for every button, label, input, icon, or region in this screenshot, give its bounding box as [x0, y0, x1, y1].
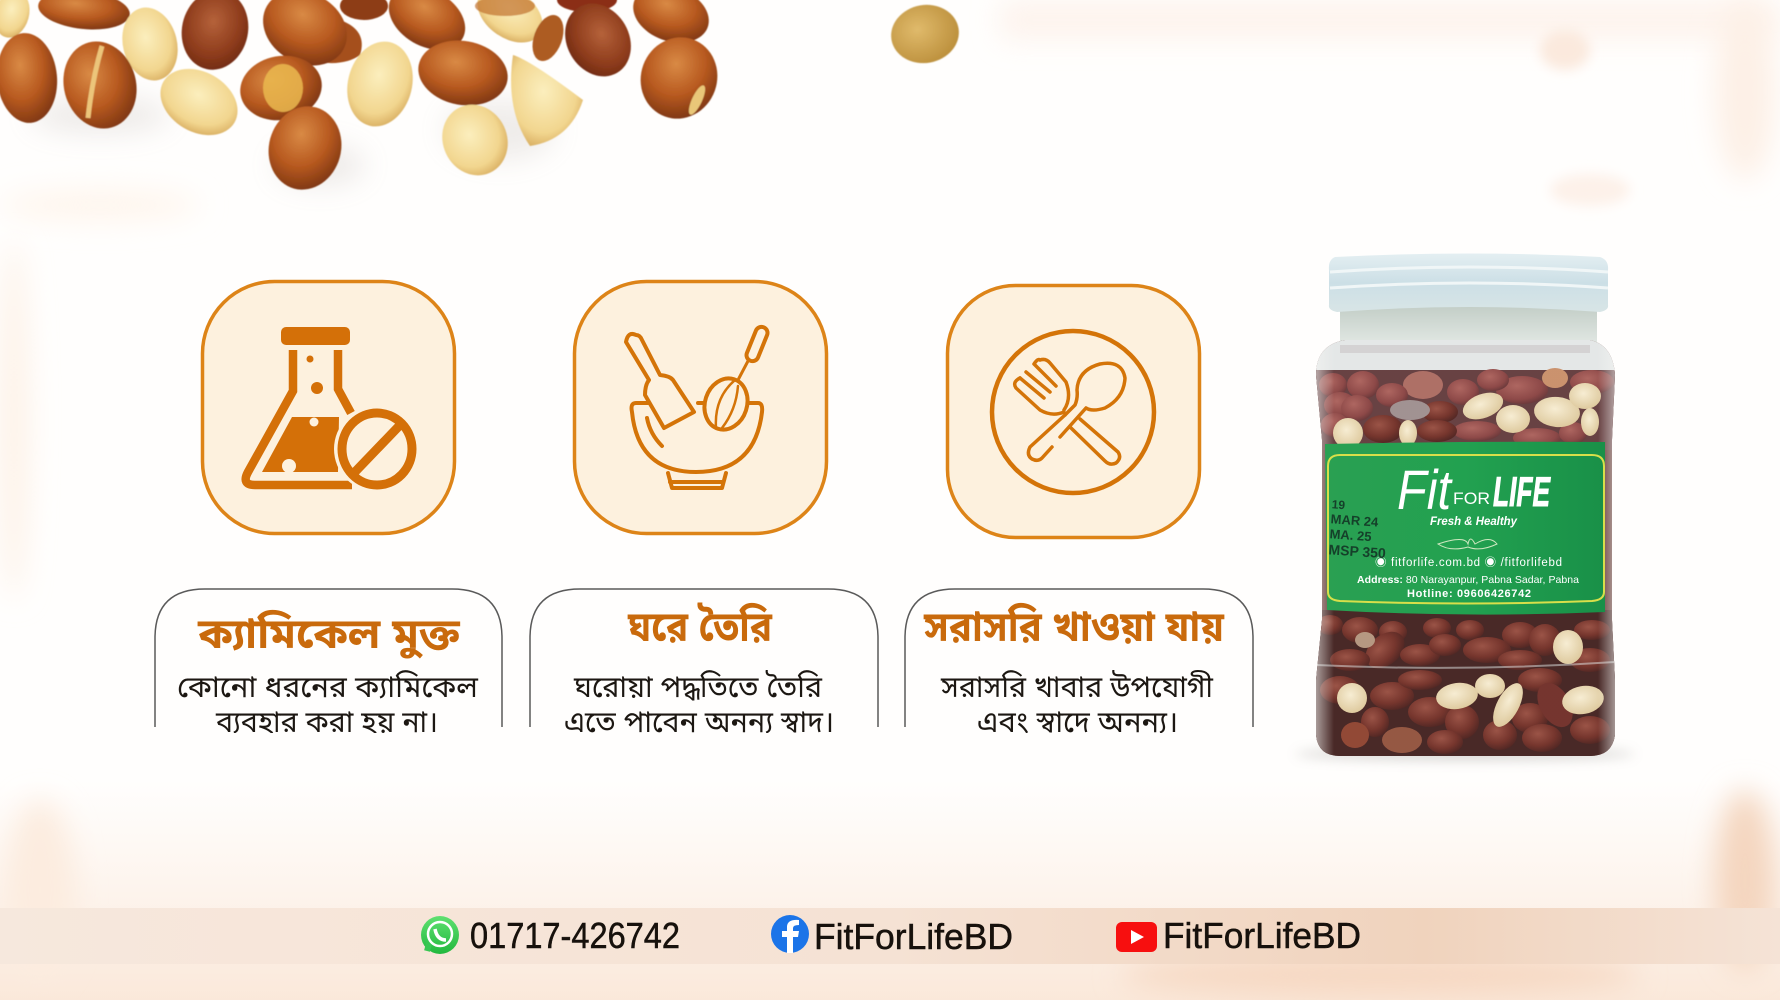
contact bar — [0, 908, 1780, 964]
jar label: LIFE — [1493, 468, 1551, 515]
jar label: MSP 350 — [1328, 541, 1387, 561]
jar label: FOR — [1453, 489, 1490, 508]
icon tile: chemical free flask — [202, 282, 454, 534]
jar lid — [1329, 254, 1608, 312]
jar label: Fresh & Healthy — [1430, 514, 1518, 528]
heading: ready to eat: সরাসরি খাওয়া যায় — [923, 602, 1225, 650]
text cards — [155, 589, 1253, 739]
jar label: Address: 80 Narayanpur, Pabna Sadar, Pabna — [1357, 574, 1579, 586]
jar label: Fit — [1397, 458, 1453, 521]
description: homemade: ঘরোয়া পদ্ধতিতে তৈরি — [573, 669, 823, 704]
description: ready to eat: সরাসরি খাবার উপযোগী — [940, 669, 1214, 704]
jar label: 19 — [1331, 497, 1346, 512]
heading: chemical free: ক্যামিকেল মুক্ত — [197, 609, 460, 659]
description: chemical free: কোনো ধরনের ক্যামিকেল — [177, 669, 479, 704]
jar label: MAR 24 — [1330, 511, 1380, 530]
facebook contact: FitForLifeBD — [814, 916, 1013, 957]
jar label: Hotline: 09606426742 — [1407, 588, 1531, 600]
card: homemade: এতে পাবেন অনন্য স্বাদ। — [564, 706, 834, 739]
card: chemical free: ব্যবহার করা হয় না। — [215, 706, 438, 739]
card: ready to eat — [905, 589, 1253, 739]
card: chemical free — [155, 589, 502, 739]
card: ready to eat: এবং স্বাদে অনন্য। — [977, 706, 1178, 739]
whatsapp contact: 01717-426742 — [470, 915, 680, 956]
icon tile: ready to eat cutlery — [948, 286, 1200, 538]
heading: homemade: ঘরে তৈরি — [627, 602, 773, 650]
jar label: MA. 25 — [1329, 526, 1372, 544]
jar label — [1325, 442, 1605, 615]
youtube contact: FitForLifeBD — [1163, 915, 1361, 956]
icon tile: homemade mixing bowl — [574, 282, 826, 534]
card: homemade — [530, 589, 878, 739]
peanuts scattered at top — [0, 0, 964, 198]
product jar — [1295, 254, 1635, 760]
jar label: ◉ fitforlife.com.bd ◉ /fitforlifebd — [1375, 556, 1562, 569]
